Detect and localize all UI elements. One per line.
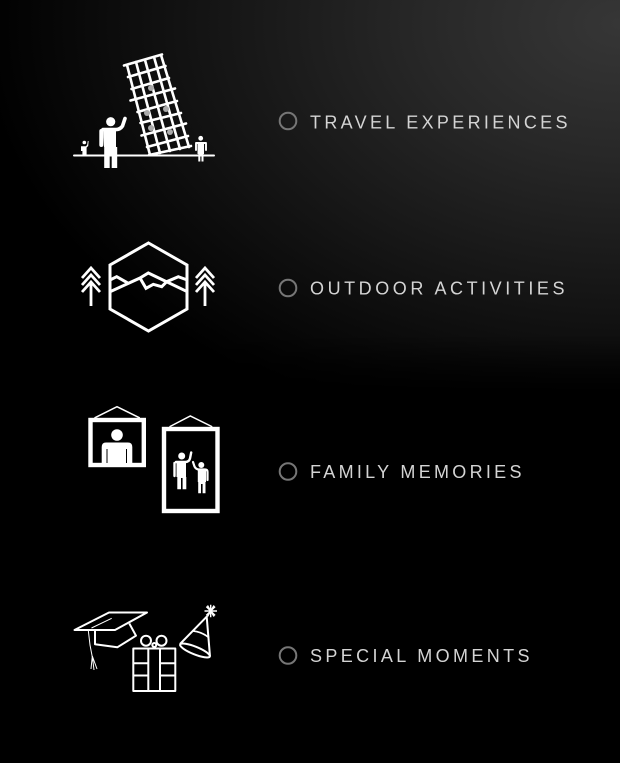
label dot: outdoor <box>280 280 296 296</box>
label: outdoor activities: OUTDOOR ACTIVITIES <box>310 278 564 298</box>
label: family memories: FAMILY MEMORIES <box>310 462 522 482</box>
label: travel experiences: TRAVEL EXPERIENCES <box>310 112 568 132</box>
icon: graduation cap, gift and party hat <box>74 605 217 691</box>
icon: framed family photos <box>90 407 218 511</box>
label dot: family <box>280 463 296 480</box>
label dot: special <box>280 647 296 664</box>
icon: mountain hexagon with trees <box>82 243 214 331</box>
label: special moments: SPECIAL MOMENTS <box>310 646 530 666</box>
label dot: travel <box>280 113 296 129</box>
icon: leaning tower with tourists <box>74 54 214 168</box>
